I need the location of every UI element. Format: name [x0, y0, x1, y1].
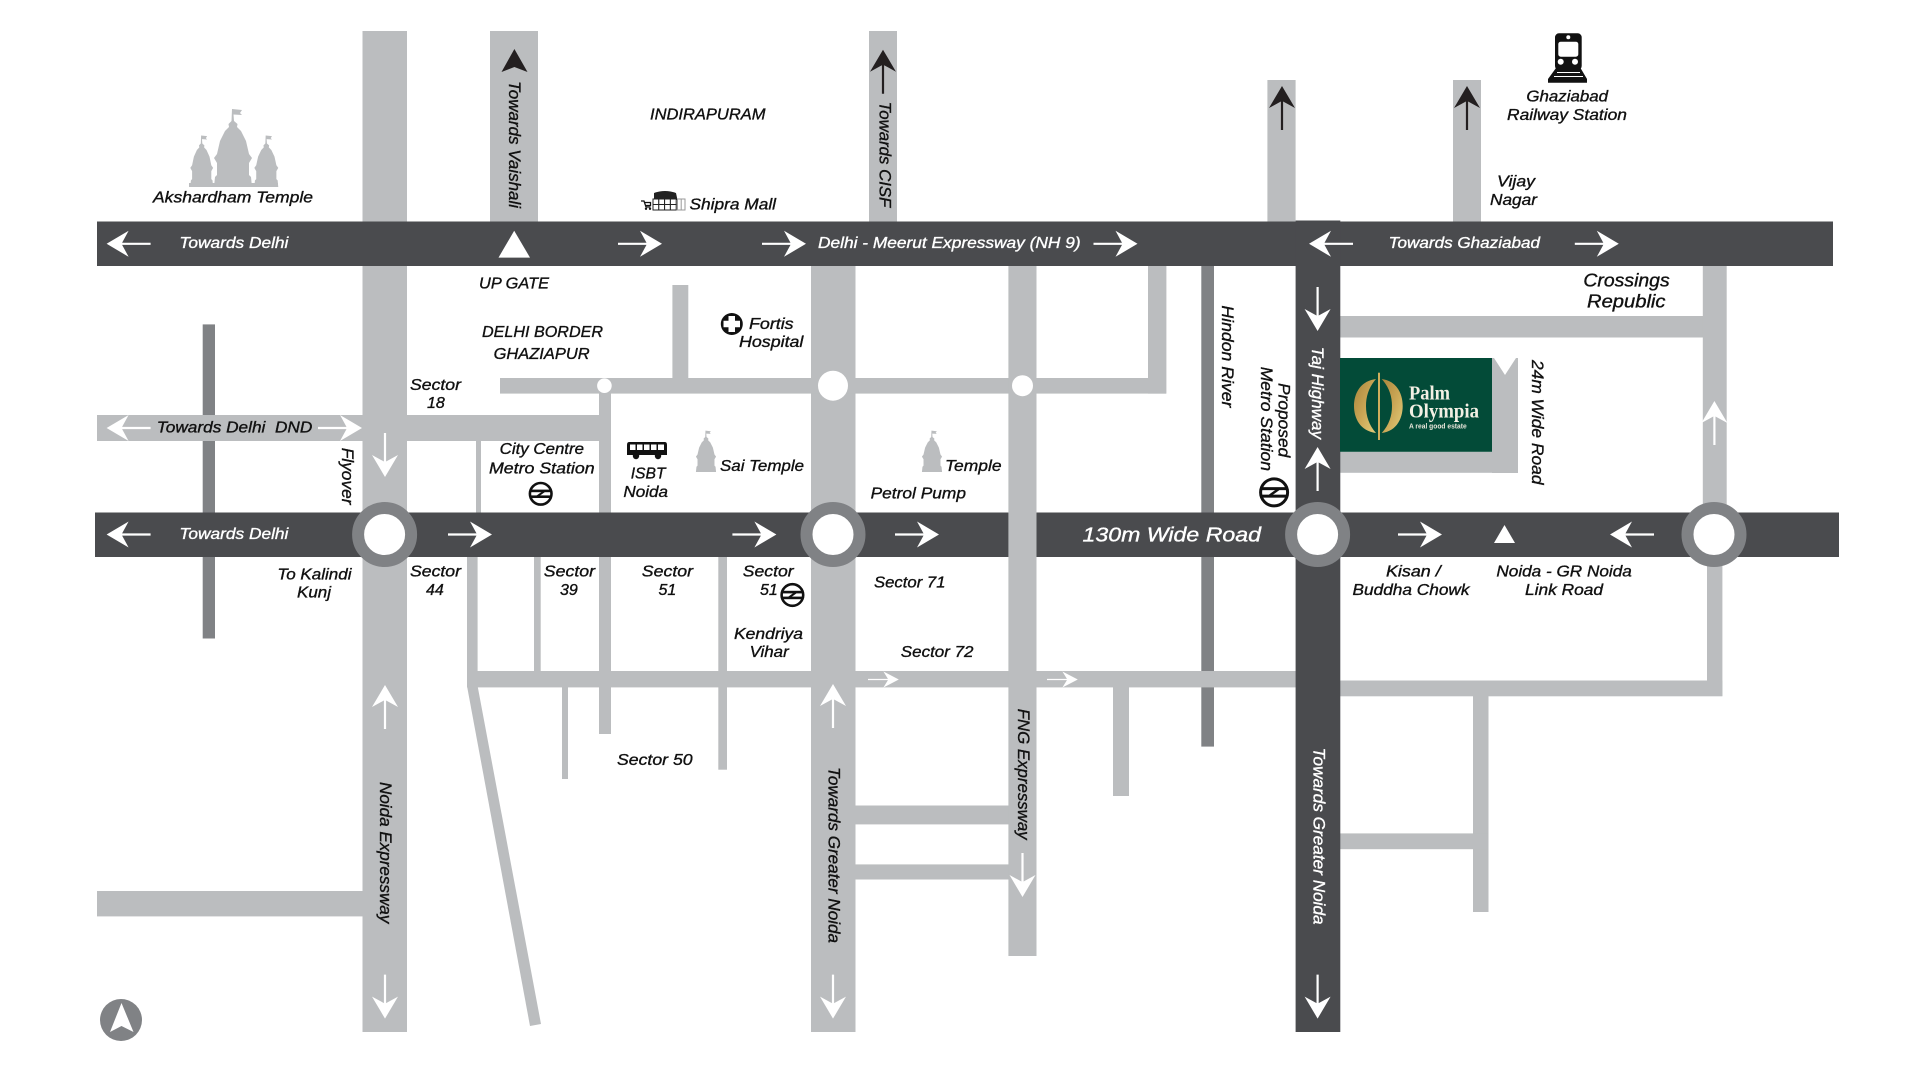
label: Hindon River: Hindon River	[1218, 305, 1237, 409]
label: Sector 39: Sector	[544, 564, 596, 580]
icon: Shipra mall	[641, 191, 685, 210]
label: Sector 50: Sector 50	[617, 752, 693, 769]
label: Proposed Metro Station: Proposed	[1275, 383, 1294, 458]
junction dots	[597, 371, 1033, 401]
road: dark vertical west	[203, 324, 215, 638]
label: Vijay Nagar: Nagar	[1490, 192, 1538, 209]
label: City Centre Metro Station: Metro Station	[489, 460, 595, 478]
label: Proposed Metro Station: Metro Station	[1257, 367, 1276, 471]
label: Flyover: Flyover	[338, 448, 357, 506]
project logo: Palm Olympia: A real good estate	[1409, 423, 1467, 430]
label: Shipra Mall: Shipra Mall	[690, 196, 776, 213]
label: Noida GR Noida Link Road: Link Road	[1525, 582, 1604, 599]
label: Temple: Temple	[945, 458, 1002, 475]
road: 130m Wide Road	[95, 512, 1839, 557]
label: Delhi Border Ghaziapur	[482, 324, 603, 363]
icon: temple	[922, 431, 942, 472]
label: 130m Wide Road: 130m Wide Road	[1082, 524, 1262, 546]
project logo: Palm Olympia: Palm	[1409, 382, 1450, 404]
junction rings	[358, 508, 1741, 561]
label: ISBT Noida: ISBT	[631, 466, 667, 483]
label: Sector 51 east: Sector	[743, 564, 794, 580]
label: 24m Wide Road: 24m Wide Road	[1528, 359, 1547, 485]
label: City Centre Metro Station: City Centre	[500, 441, 584, 458]
label: Sector 39: 39	[560, 582, 578, 599]
label: Kisan Buddha Chowk: Buddha Chowk	[1352, 582, 1471, 599]
label: Crossings Republic: Crossings	[1583, 270, 1670, 290]
label: Ghaziabad Railway Station: Ghaziabad	[1526, 89, 1609, 106]
label: Fortis Hospital: Fortis	[749, 316, 794, 333]
label: To Kalindi Kunj	[277, 566, 352, 602]
label: Sector 51 west: 51	[658, 582, 676, 599]
label: Towards Delhi upper: Towards Delhi	[179, 235, 289, 252]
road: FNG Expressway	[1008, 266, 1036, 956]
black direction arrows	[502, 49, 1480, 130]
label: Sector 18: Sector	[410, 377, 462, 394]
road: Towards Delhi DND	[97, 415, 611, 441]
label: Ghaziabad Railway Station	[1507, 89, 1627, 124]
label: Sector 44	[410, 564, 462, 599]
label: FNG Expressway: FNG Expressway	[1014, 709, 1033, 841]
label: Towards Delhi DND: Towards Delhi DND	[157, 420, 313, 436]
label: Taj Highway: Taj Highway	[1308, 347, 1327, 440]
label: Sector 51 west: Sector	[642, 564, 694, 580]
label: Delhi Border Ghaziapur: DELHI BORDER	[482, 324, 603, 341]
minor grey road network	[97, 31, 1727, 1032]
label: Proposed Metro Station	[1257, 367, 1294, 471]
label: Sector 18	[410, 377, 462, 412]
label: Sector 44: Sector	[410, 564, 462, 580]
label: Towards Ghaziabad: Towards Ghaziabad	[1389, 235, 1541, 252]
road: Hindon River	[1201, 266, 1214, 747]
label: Sai Temple: Sai Temple	[720, 458, 804, 475]
label: Kendriya Vihar	[734, 626, 803, 661]
label: Sector 18: 18	[427, 395, 445, 412]
label: Towards Greater Noida grey road: Towards Greater Noida	[825, 767, 844, 943]
label: Sector 72: Sector 72	[901, 644, 974, 661]
label: Towards Vaishali: Towards Vaishali	[505, 81, 524, 209]
label: Sector 44: 44	[426, 582, 444, 599]
label: Sector 51 east: 51	[760, 582, 778, 599]
icon: City Centre metro	[530, 483, 552, 505]
icon: proposed metro	[1260, 479, 1288, 506]
project logo: Palm Olympia: Olympia	[1409, 400, 1479, 422]
icon: Fortis hospital cross	[721, 313, 743, 335]
icon: north compass	[100, 999, 142, 1041]
label: Noida GR Noida Link Road: Noida - GR Noida	[1496, 564, 1632, 580]
label: Towards Greater Noida dark road: Towards Greater Noida	[1310, 748, 1328, 925]
label: Kisan Buddha Chowk: Kisan /	[1386, 564, 1442, 580]
label: Delhi Meerut Expressway: Delhi - Meerut Expressway (NH 9)	[818, 235, 1081, 252]
icon: Sector 51 metro	[781, 584, 803, 606]
icon: Sai temple	[696, 431, 716, 472]
label: ISBT Noida	[623, 466, 668, 501]
label: Vijay Nagar	[1490, 173, 1538, 209]
label: Vijay Nagar: Vijay	[1497, 173, 1536, 190]
label: Kendriya Vihar: Vihar	[750, 644, 789, 661]
label: UP Gate: UP GATE	[479, 276, 549, 293]
label: Sector 39	[544, 564, 596, 599]
road: Taj Highway	[1296, 220, 1340, 1032]
label: Delhi Border Ghaziapur: GHAZIAPUR	[494, 346, 590, 363]
label: Ghaziabad Railway Station: Railway Station	[1507, 107, 1627, 124]
label: Akshardham Temple: Akshardham Temple	[152, 190, 313, 206]
label: City Centre Metro Station	[489, 441, 595, 478]
label: To Kalindi Kunj: Kunj	[297, 584, 331, 602]
label: ISBT Noida: Noida	[623, 484, 668, 501]
label: Crossings Republic: Republic	[1587, 292, 1666, 312]
label: Sector 51 east	[743, 564, 794, 599]
label: Fortis Hospital: Hospital	[739, 334, 804, 351]
label: Noida Expressway: Noida Expressway	[376, 782, 395, 925]
label: Kisan Buddha Chowk	[1352, 564, 1471, 599]
label: Towards Delhi lower: Towards Delhi	[179, 526, 289, 543]
label: Fortis Hospital	[739, 316, 804, 351]
label: Indirapuram: INDIRAPURAM	[650, 106, 766, 124]
project logo: Palm Olympia	[1340, 358, 1492, 452]
label: Sector 71: Sector 71	[874, 574, 946, 592]
white direction arrows	[107, 231, 1727, 1019]
icon: Ghaziabad railway train	[1548, 33, 1587, 83]
label: Towards CISF: Towards CISF	[876, 102, 894, 209]
road: Sector 72 link	[467, 671, 1296, 687]
label: Crossings Republic	[1583, 270, 1670, 312]
icon: Akshardham temple	[189, 109, 278, 187]
label: Sector 51 west	[642, 564, 694, 599]
label: Kendriya Vihar: Kendriya	[734, 626, 803, 643]
label: Petrol Pump: Petrol Pump	[871, 486, 966, 503]
label: Noida GR Noida Link Road	[1496, 564, 1632, 599]
label: To Kalindi Kunj: To Kalindi	[277, 566, 352, 583]
icon: ISBT bus	[627, 442, 667, 459]
road: Delhi Meerut Expressway	[97, 222, 1833, 266]
